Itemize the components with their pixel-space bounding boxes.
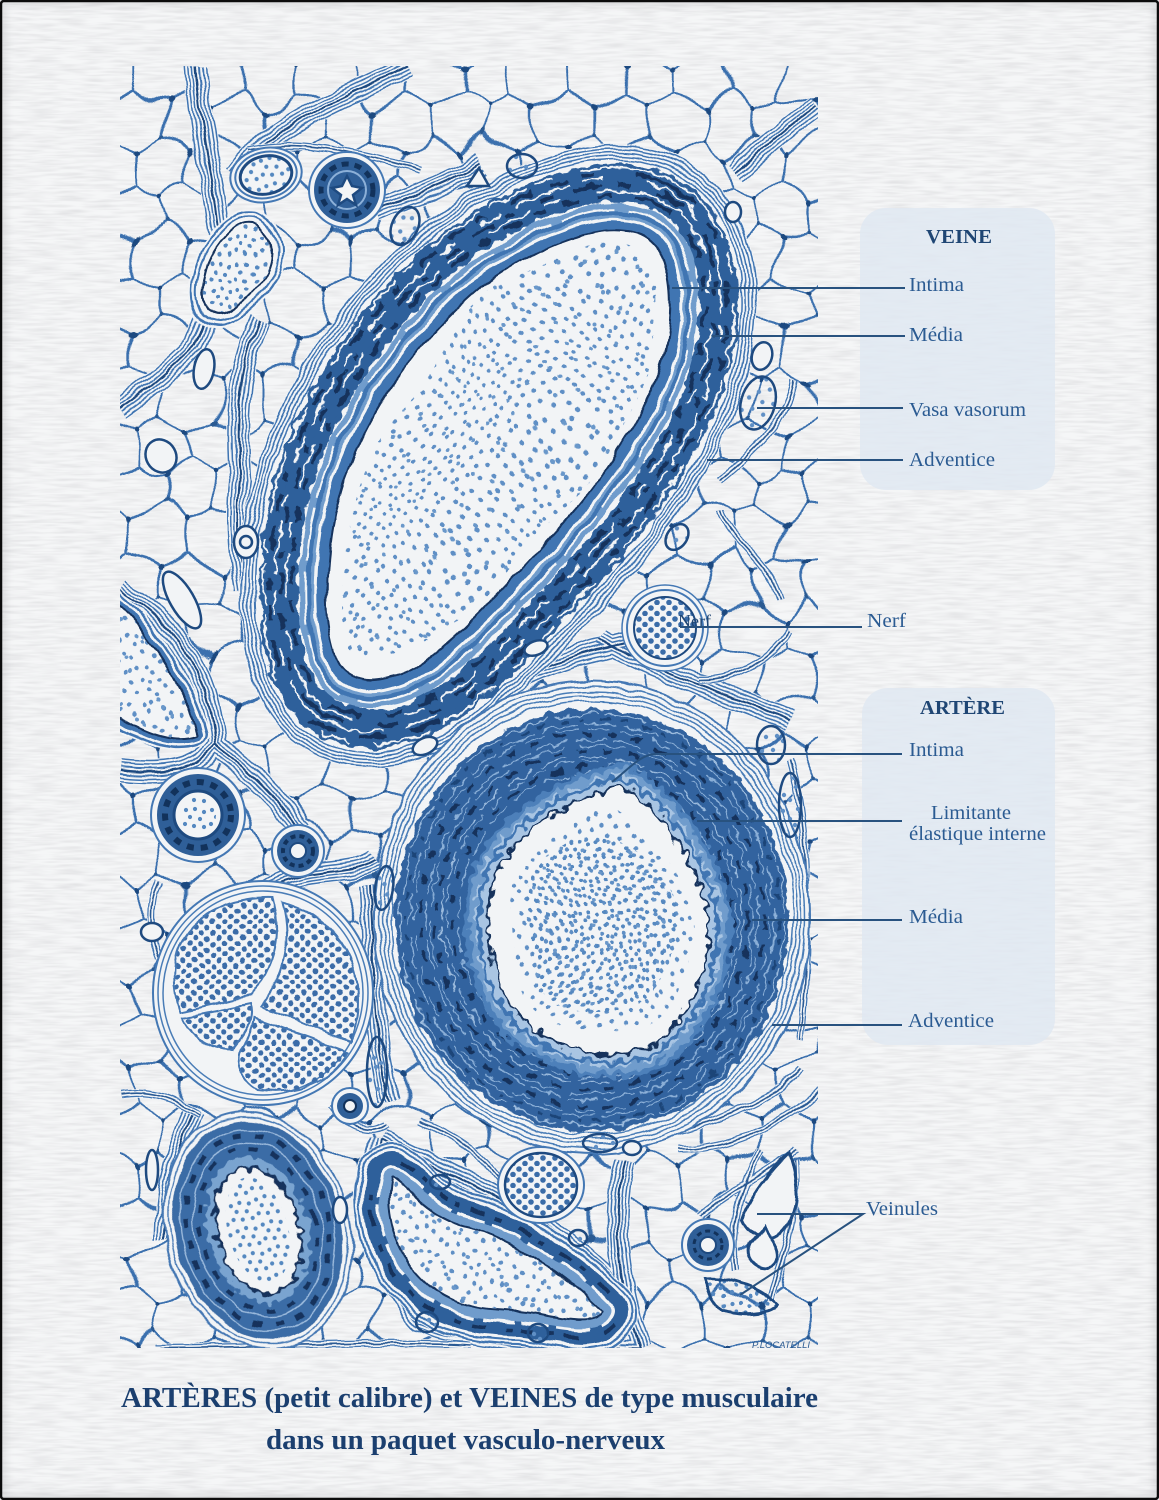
artery media (395, 709, 789, 1131)
callout: artère intima (612, 739, 964, 782)
callout: artère adventice: Adventice (908, 1010, 994, 1032)
title: ARTÈRES (petit calibre) et VEINES de type musculaire (121, 1383, 818, 1414)
title: dans un paquet vasculo-nerveux (266, 1425, 665, 1456)
fascicle: upper right (262, 902, 358, 1042)
artery intima and internal elastic lamina (489, 788, 707, 1053)
left small artery (151, 768, 245, 862)
upper left vein (100, 590, 196, 738)
large nerve bundle (153, 881, 373, 1105)
lower nerve (498, 1147, 584, 1223)
callout: veinules (740, 1198, 938, 1295)
callout: nerf (678, 610, 906, 632)
tiny artery (332, 1088, 368, 1124)
nerve (622, 585, 708, 671)
adipose tissue cells (120, 66, 818, 1348)
callout: veinules: Veinules (866, 1198, 938, 1220)
top venule (229, 146, 303, 204)
callout: artère média: Média (909, 906, 963, 928)
small artery by nerve bundle (272, 825, 324, 877)
fascicle: bottom (239, 1018, 348, 1091)
artery lumen blood cells (503, 802, 694, 1040)
callout: vasa vasorum: Vasa vasorum (909, 399, 1026, 421)
vein intima and lumen (328, 232, 669, 680)
top small artery (309, 152, 385, 228)
callout: veine adventice: Adventice (909, 449, 995, 471)
veinules bottom right (705, 1152, 797, 1314)
fascicle: lower left (182, 1004, 252, 1050)
panel: artère legend background (862, 688, 1055, 1045)
bottom right small artery (682, 1219, 734, 1271)
callout: veine média: Média (909, 324, 963, 346)
callout: limitante élastique interne: élastique interne (909, 823, 1046, 845)
fascicles (174, 898, 358, 1091)
title (121, 1383, 818, 1456)
callout: nerf: Nerf (867, 610, 906, 632)
upper left venule (203, 224, 270, 314)
lower centre vein (390, 1178, 602, 1318)
callout: veine intima: Intima (909, 274, 964, 296)
vasa vasorum and small vessels (140, 154, 801, 1342)
artery adventitia (374, 681, 810, 1153)
lower left artery (162, 1110, 356, 1348)
large artery (374, 681, 810, 1153)
vein media with muscle nuclei (328, 232, 669, 680)
fascicle: upper left (174, 898, 277, 1012)
callout: limitante élastique interne (697, 802, 1046, 845)
callout: nerf: Nerf (678, 611, 711, 631)
histology illustration (120, 66, 818, 1348)
large vein (328, 232, 669, 680)
callout: artère intima: Intima (909, 739, 964, 761)
heading: VEINE: VEINE (926, 226, 992, 248)
signature: P.LOCATELLI (752, 1340, 810, 1351)
callout: limitante élastique interne: Limitante (931, 802, 1011, 824)
connective tissue fibres (120, 66, 820, 1348)
heading: ARTÈRE: ARTÈRE (920, 696, 1005, 719)
panel: veine legend background (860, 208, 1055, 490)
vein lumen blood cells (342, 247, 656, 666)
vein adventitia (328, 232, 669, 680)
